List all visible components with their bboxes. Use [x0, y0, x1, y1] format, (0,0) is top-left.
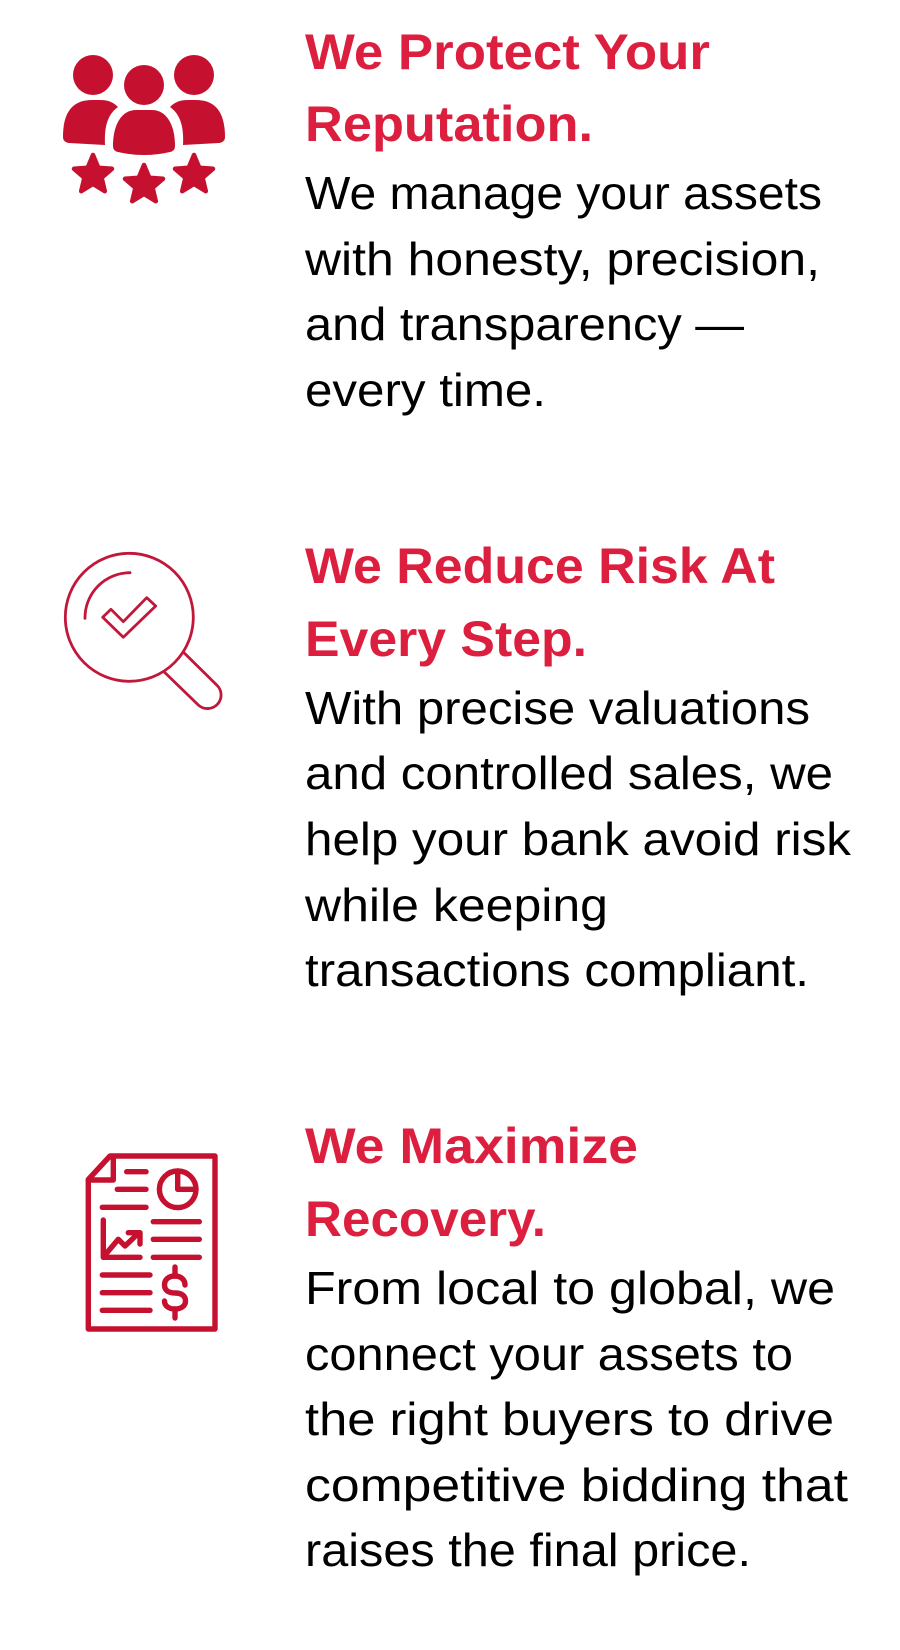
- text block: reputation description: [304, 167, 822, 416]
- text block: recovery description: From local to global, we: [305, 1262, 835, 1314]
- text block: risk description: [304, 682, 852, 996]
- text block: risk description: and controlled sales, we: [305, 747, 833, 799]
- text block: reputation description: and transparency —: [305, 298, 744, 350]
- heading: we protect your reputation: Reputation.: [305, 96, 593, 152]
- heading: we protect your reputation: [305, 24, 710, 152]
- text block: recovery description: competitive bidding that: [305, 1459, 848, 1511]
- panel: reduce risk: [65, 538, 852, 996]
- text block: recovery description: the right buyers to drive: [305, 1393, 834, 1445]
- icon: three people with stars: [63, 55, 225, 201]
- text block: reputation description: We manage your assets: [305, 167, 822, 219]
- text block: recovery description: raises the final price.: [305, 1524, 751, 1576]
- heading: we maximize recovery: Recovery.: [305, 1191, 546, 1247]
- text block: reputation description: with honesty, precision,: [304, 233, 820, 285]
- text block: risk description: help your bank avoid risk: [305, 813, 852, 865]
- text block: recovery description: [305, 1262, 848, 1576]
- heading: we protect your reputation: We Protect Your: [305, 24, 710, 80]
- heading: we reduce risk at every step: We Reduce Risk At: [305, 538, 775, 594]
- text block: risk description: while keeping: [304, 879, 608, 931]
- panel: protect your reputation: [63, 24, 822, 416]
- heading: we reduce risk at every step: [305, 538, 775, 667]
- text block: risk description: transactions compliant.: [305, 944, 809, 996]
- panel: maximize recovery: [88, 1118, 848, 1576]
- icon: financial report document: [88, 1156, 215, 1329]
- icon: magnifier with check mark: [65, 553, 221, 709]
- heading: we reduce risk at every step: Every Step.: [305, 611, 587, 667]
- text block: risk description: With precise valuations: [305, 682, 810, 734]
- heading: we maximize recovery: [305, 1118, 638, 1247]
- text block: recovery description: connect your assets to: [305, 1328, 793, 1380]
- text block: reputation description: every time.: [305, 364, 546, 416]
- heading: we maximize recovery: We Maximize: [305, 1118, 638, 1174]
